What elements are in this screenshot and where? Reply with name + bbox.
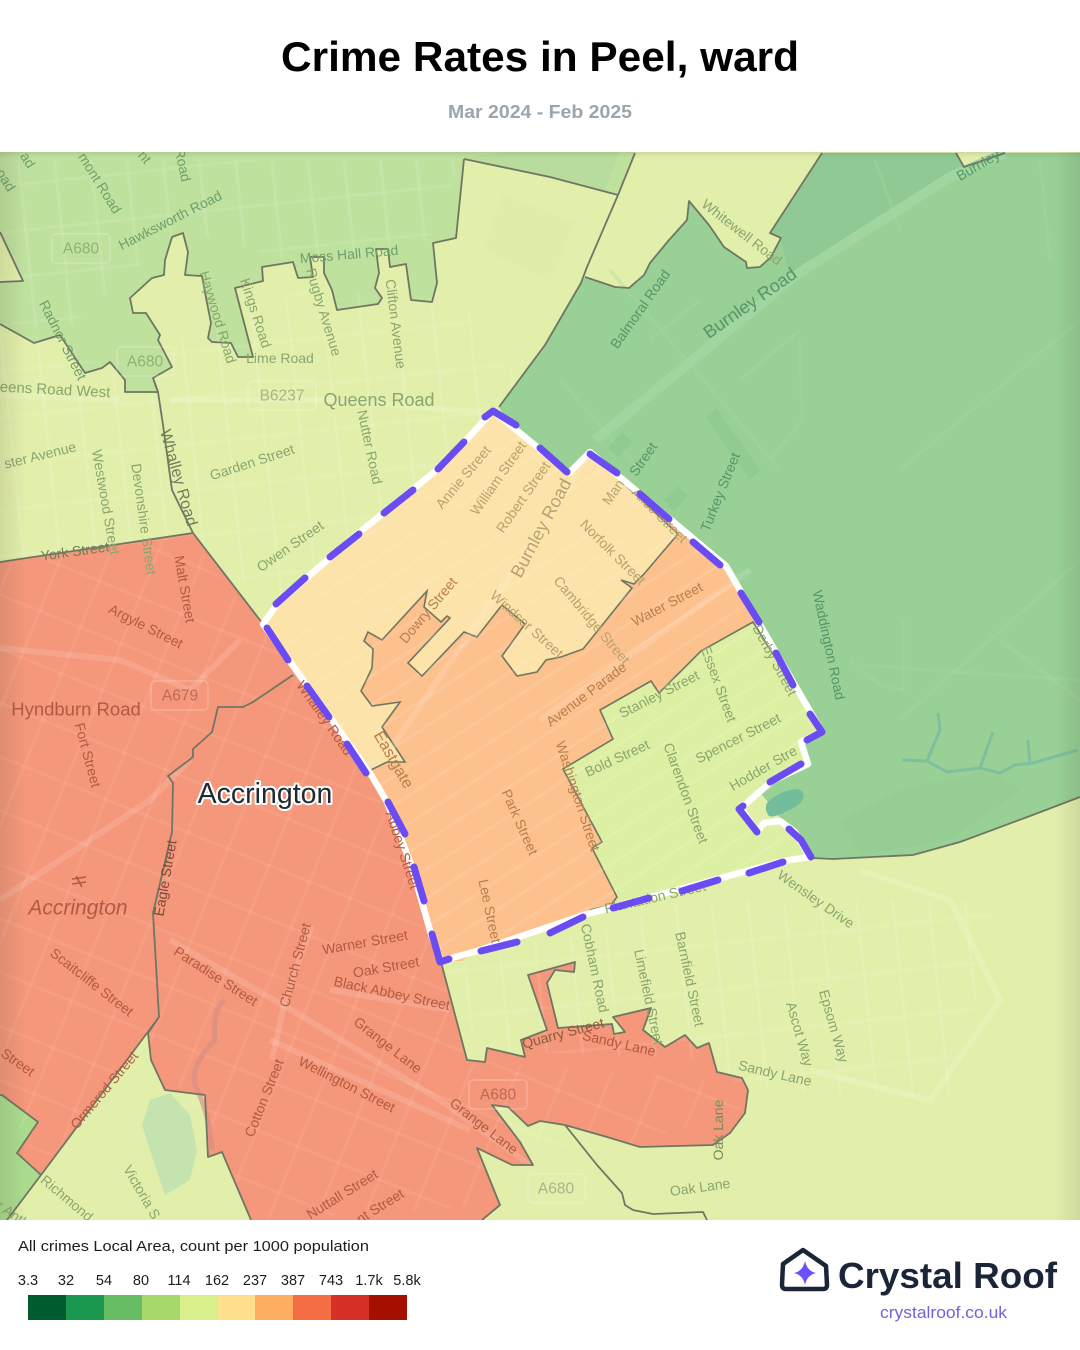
street labels: red zone: Abbey Street [383,809,423,891]
street labels: ward peach zone: Alice Street [629,484,691,546]
street grid: south [445,900,1000,1100]
street labels: red zone: Ormerod Street [67,1048,141,1132]
street labels: ward light green zone: Bold Street [582,736,652,780]
street labels: ward light green zone: Stanley Street [616,667,702,721]
legend scale values [18,1273,421,1289]
street labels: east green zone: Burnley [953,146,1003,184]
street labels: yellow-green zone north: Owen Street [254,517,327,575]
street labels: east green zone: Burnley Road [700,264,800,342]
legend scale values: 5.8k [393,1273,421,1289]
badge: A679: A679 [162,688,198,704]
road badges [52,234,585,1203]
street labels: ward peach zone: Robert Street [493,458,553,536]
area: high crime red zone [0,533,748,1220]
badge: A679 [151,681,208,710]
street labels: north-west green: mont Road [75,150,125,216]
place label: Accrington: Accrington [198,778,332,810]
street labels: red zone: Church Street [276,921,314,1009]
street labels: yellow-green zone north: Haywood Road [196,269,240,365]
water: river in red zone [194,1000,225,1150]
street labels: south green zone: Limefield Street [631,948,667,1046]
street grid: top-left green [0,160,460,335]
badge: A680 south [528,1174,585,1203]
street labels: ward orange zone: Eastgate [370,728,416,792]
ward: base orange zone [362,512,766,961]
street labels: north-west green: Hawksworth Road [116,187,224,253]
street labels: red zone: Accrington [26,896,128,920]
street labels: ward peach zone: Burnley Road [507,475,575,581]
legend scale values: 387 [281,1273,305,1289]
park: lake and green space [142,1093,197,1195]
legend scale values: 114 [167,1273,191,1289]
street labels: yellow-green zone north: ster Avenue [2,438,78,472]
street labels: red zone: Scaitcliffe Street [47,945,137,1019]
street labels: south green zone: Ascot Way [783,1000,817,1068]
street labels: south green zone: Victoria S [120,1162,164,1222]
street labels: ward peach zone: William Street [467,438,529,518]
street labels: ward peach zone: Norfolk Street [577,516,649,588]
badge: A680 central [117,347,174,376]
legend scale values: 80 [133,1273,149,1289]
street labels: red zone: Grange Lane [447,1095,521,1158]
darker woodland patches [613,440,624,452]
street labels: yellow-green zone north: Lime Road [246,350,314,366]
main roads [0,395,1000,1165]
street labels: red zone: Paradise Street [171,943,261,1009]
street labels: ward orange zone: Dowry Street [396,574,460,646]
street grid: red zone [0,535,740,1220]
street labels: north-west green: Moss Hall Road [299,242,399,266]
street labels: ward orange zone: Lee Street [475,878,505,944]
legend colour ramp [28,1295,407,1320]
street labels: east green zone: Waddington Road [810,589,848,701]
legend [18,1239,421,1320]
street labels: red zone: Sandy Lane [581,1027,657,1059]
street labels: red zone: Black Abbey Street [332,973,452,1013]
ward outline: white boundary [263,411,822,961]
street labels: red zone: Warner Street [321,927,409,957]
legend scale values: 162 [205,1273,229,1289]
street labels: red zone: Malt Street [171,554,199,624]
badge: A680 south: A680 [538,1180,574,1198]
side roads on green [608,269,626,287]
street labels: south green zone: Plantation Street [603,878,707,916]
street labels: ward peach zone: Windsor Street [487,587,567,661]
area: east green zone [499,153,1080,859]
street labels: south green zone: Epsom Way [816,988,852,1064]
website link: crystalroof.co.uk [880,1304,1008,1322]
street labels: north-west green: Radnor Street [36,298,90,383]
street grid: north central [180,292,514,595]
badge: A680 on red zone: A680 [480,1086,516,1104]
icon: crystal star [794,1261,816,1285]
legend scale values: 54 [96,1273,112,1289]
top right field shade [465,152,620,190]
area: north-west wedge [0,234,22,281]
street labels: south green zone: Wensley Drive [775,867,858,931]
street labels: red zone: Argyle Street [106,600,186,652]
street labels: south green zone [0,867,858,1231]
street labels: yellow-green zone north: Garden Street [208,441,296,483]
street labels: yellow-green zone north: Clifton Avenue [383,278,409,370]
logo wordmark: Crystal Roof [838,1255,1058,1296]
logo: Crystal Roof [782,1250,1058,1322]
street labels: red zone: Quarry Street [520,1014,606,1052]
street labels: east green zone: Street [626,439,660,479]
street labels: north-west green [0,139,399,383]
street labels: yellow-green zone north: Westwood Street [89,448,123,556]
street labels: yellow-green zone north [0,266,435,576]
legend scale values: 237 [243,1273,267,1289]
street labels: south green zone: Barnfield Street [672,930,708,1028]
street labels: ward light green zone: Spencer Street [693,710,783,766]
badge: A680 central: A680 [127,354,163,370]
street labels: north-west green: ad [17,149,39,171]
legend scale values: 743 [319,1273,343,1289]
street labels: south green zone: Richmond [38,1172,96,1224]
icon: house outline [782,1250,827,1289]
street labels: east green zone: Turkey Street [697,450,743,534]
street labels: ward orange zone: Avenue Parade [543,659,629,729]
street labels: ward peach zone: Cambridge Street [551,573,633,667]
ward: light green zone [563,622,822,910]
badge: A680 on red zone [469,1080,527,1109]
street labels: ward orange zone: Washington Street [553,739,603,853]
badge: B6237 [248,381,316,410]
street labels: yellow-green zone north: eens Road West [0,379,112,401]
legend scale values: 3.3 [18,1273,38,1289]
street labels: ward orange zone: Park Street [498,787,542,857]
street labels: east green zone: Balmoral Road [607,266,673,352]
street labels: ward peach zone [432,438,691,667]
street labels: red zone: Oak Street [352,953,420,981]
field outlines [484,195,575,282]
street labels: yellow-green zone north: Devonshire Street [128,462,160,576]
street labels: yellow-green zone north: York Street [40,538,110,564]
street labels: ward light green zone: Hodder Stre [726,742,800,794]
ward outline: purple dashes [267,411,822,962]
street grid: ward [263,411,822,961]
street labels: ward orange zone: Water Street [629,579,705,629]
street labels: ward orange zone [370,574,705,944]
water: stream [902,713,1078,773]
street labels: yellow-green zone north: Kings Road [237,276,275,350]
ward: peach zone [263,411,678,770]
street labels: red zone: Fort Street [72,721,104,789]
main road: Burnley Road on green [595,153,1005,440]
street labels: red zone: Grange Lane [351,1014,425,1077]
street labels: south green zone: Sandy Lane [737,1057,813,1089]
street labels: yellow-green zone north: Queens Road [323,390,435,410]
street labels: red zone: nt Street [353,1185,407,1227]
street labels: red zone: Nuttall Street [303,1166,381,1222]
area: darker northern green tint [782,240,786,260]
street labels: red zone [0,554,657,1227]
street labels: east green zone: Whitewell Road [699,196,785,268]
street labels: ward light green zone: Derby Street [749,622,801,699]
street labels: ward peach zone: Man [599,476,627,508]
street labels: south green zone: Oak Lane [710,1099,726,1160]
subtitle: date range: Mar 2024 - Feb 2025 [448,102,632,122]
street labels: red zone: Hyndburn Road [11,698,141,720]
street labels: red zone: Wellington Street [296,1053,398,1115]
legend scale values: 32 [58,1273,74,1289]
area boundary lines [0,153,1080,1220]
map edge shading [0,152,1080,1220]
legend scale values: 1.7k [355,1273,383,1289]
street labels: north-west green: Rib [197,139,219,155]
street labels: red zone: Whalley Road [293,678,357,758]
area: north-east small yellow corner [957,153,992,166]
street labels: yellow-green zone north: Nutter Road [354,408,386,486]
badge: B6237: B6237 [260,388,304,404]
street labels: south green zone: Oak Lane [669,1175,731,1199]
street labels: north-west green: nt [135,147,155,167]
street labels: ward light green zone: Clarendon Street [660,741,712,846]
street labels: red zone: Eagle Street [150,839,180,917]
street labels: yellow-green zone north: Whalley Road [156,428,200,528]
street labels: north-west green: Road [172,147,194,183]
street labels: ward light green zone [582,622,801,846]
street grid: north [0,330,200,562]
area: north-west green zone [0,152,635,392]
street labels: ward light green zone: Essex Street [698,644,740,724]
badge: A680 north-west [52,234,110,263]
badge: A680 north-west: A680 [63,240,99,258]
street labels: east green zone [607,146,1003,701]
street labels: yellow-green zone north: Rugby Avenue [303,266,345,358]
legend title: All crimes Local Area, count per 1000 population [18,1239,369,1255]
street labels: south green zone: Cobham Road [578,922,612,1014]
street labels: ward peach zone: Annie Street [432,442,494,512]
railway station icon [72,876,86,887]
water: pond [766,789,803,816]
map base area [0,152,1080,1220]
title: Crime Rates in Peel, ward [281,33,799,80]
area: south-west green corner [0,1095,41,1220]
street labels: red zone: Cotton Street [241,1057,287,1139]
